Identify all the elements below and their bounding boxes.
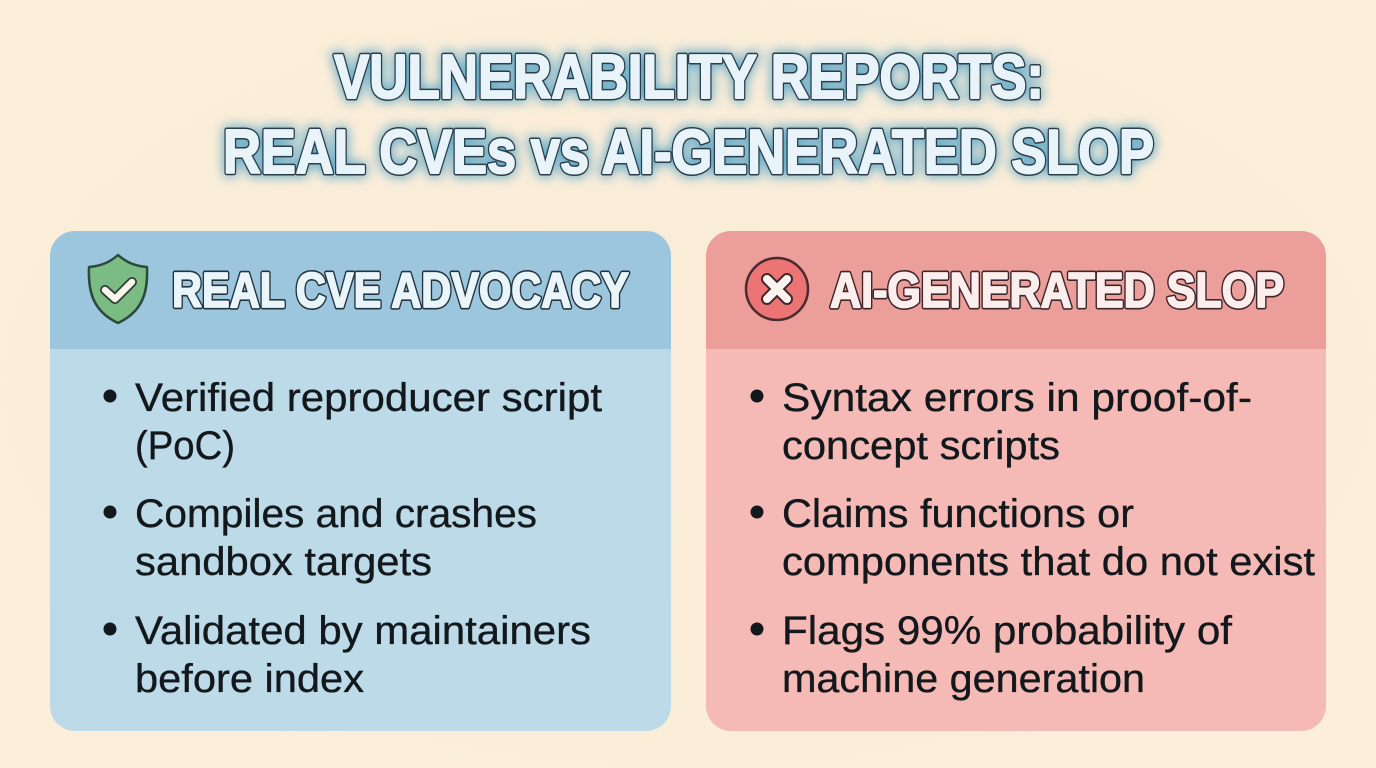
bullet: flags 99%: machine generation: [782, 657, 1145, 701]
bullet: validated by maintainers: Validated by maintainers: [135, 609, 591, 653]
title: REAL CVEs vs AI-GENERATED SLOP: [223, 118, 1154, 187]
bullet: syntax errors: concept scripts: [782, 424, 1060, 468]
title: REAL CVEs vs AI-GENERATED SLOP: [223, 118, 1154, 187]
panel heading: REAL CVE ADVOCACY: [172, 264, 629, 318]
icon: green shield with check: [89, 255, 147, 323]
bullet: compiles and crashes: Compiles and crashes: [135, 492, 537, 536]
panel body: [50, 231, 671, 731]
bullet: flags 99%: [750, 609, 1233, 701]
bullet: validated by maintainers: before index: [135, 657, 364, 701]
panel: AI-generated slop: [706, 231, 1326, 731]
title: [223, 43, 1154, 187]
title: REAL CVEs vs AI-GENERATED SLOP: [223, 118, 1154, 187]
bullet: verified reproducer: (PoC): [135, 424, 235, 468]
bullet: compiles and crashes: [104, 492, 537, 584]
title: VULNERABILITY REPORTS:: [334, 43, 1044, 112]
bullet: verified reproducer: Verified reproducer script: [135, 376, 602, 420]
bullet: syntax errors: [750, 376, 1252, 468]
icon: red circle with X: [746, 258, 808, 320]
title: VULNERABILITY REPORTS:: [334, 43, 1044, 112]
title: VULNERABILITY REPORTS:: [334, 43, 1044, 112]
bullet: syntax errors: Syntax errors in proof-of-: [782, 376, 1252, 420]
panel header band: [50, 231, 671, 349]
panel body: [706, 231, 1326, 731]
bullet: flags 99%: Flags 99% probability of: [782, 609, 1233, 653]
bullet: claims functions: Claims functions or: [782, 492, 1134, 536]
panel heading: REAL CVE ADVOCACY: [172, 264, 629, 318]
panel header band: [706, 231, 1326, 349]
bullet: claims functions: [750, 492, 1315, 584]
bullet: validated by maintainers: [104, 609, 591, 701]
panel heading: AI-GENERATED SLOP: [830, 264, 1284, 318]
bullet: compiles and crashes: sandbox targets: [135, 540, 432, 584]
panel heading: AI-GENERATED SLOP: [830, 264, 1284, 318]
panel: real CVE advocacy: [50, 231, 671, 731]
bullet: claims functions: components that do not exist: [782, 540, 1315, 584]
bullet: verified reproducer: [104, 376, 602, 468]
